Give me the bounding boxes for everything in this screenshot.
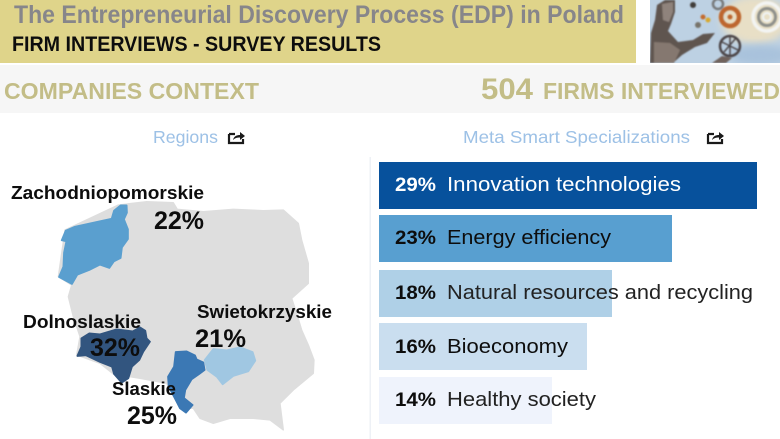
label: regions: Regions [153, 127, 218, 147]
bar: natural resources and recycling: 18% [395, 283, 436, 304]
bar: healthy society: Healthy society [447, 388, 597, 411]
icon: export regions [229, 132, 245, 143]
label: Slaskie: Slaskie [112, 379, 176, 399]
label: Dolnoslaskie: 32% [90, 334, 140, 362]
map: country outline [58, 202, 314, 430]
bar: natural resources and recycling [379, 270, 753, 317]
label: Dolnoslaskie: Dolnoslaskie [23, 312, 141, 332]
bar: natural resources and recycling: Natural resources and recycling [447, 281, 753, 304]
map of Poland [11, 183, 332, 430]
label: Slaskie: 25% [127, 402, 177, 430]
heading: firms interviewed [481, 73, 780, 106]
region: Slaskie [168, 351, 205, 413]
label: Zachodniopomorskie: Zachodniopomorskie [11, 183, 204, 203]
bar: innovation technologies [379, 162, 757, 209]
region: Zachodniopomorskie [59, 205, 128, 284]
label: Swietokrzyskie: Swietokrzyskie [197, 302, 332, 322]
bar: healthy society [379, 377, 597, 424]
label: Zachodniopomorskie [11, 183, 204, 235]
title banner [0, 0, 636, 63]
heading: firms interviewed: FIRMS INTERVIEWED [543, 78, 780, 104]
bar: innovation technologies: 29% [395, 175, 436, 196]
label: Swietokrzyskie: 21% [195, 325, 246, 353]
section band [0, 65, 780, 113]
bar: energy efficiency: Energy efficiency [447, 226, 612, 249]
bar: bioeconomy: 16% [395, 337, 436, 358]
icon: export specializations [708, 132, 724, 143]
label: Swietokrzyskie [195, 302, 332, 353]
region: Swietokrzyskie [205, 347, 255, 384]
bar: healthy society: 14% [395, 390, 436, 411]
title: The Entrepreneurial Discovery Process (EDP) in Poland [14, 1, 624, 29]
label: meta smart specializations: Meta Smart Specializations [463, 127, 690, 147]
heading: companies context: COMPANIES CONTEXT [4, 78, 259, 104]
bar: innovation technologies: Innovation technologies [447, 173, 681, 196]
label: Zachodniopomorskie: 22% [154, 207, 204, 235]
subtitle: FIRM INTERVIEWS - SURVEY RESULTS [12, 33, 381, 56]
heading: firms interviewed: 504 [481, 73, 533, 106]
label: Slaskie [112, 379, 177, 430]
bar: energy efficiency [379, 215, 672, 262]
bar: energy efficiency: 23% [395, 228, 436, 249]
region: Dolnoslaskie [77, 327, 150, 383]
illustration: statue with gears [650, 0, 780, 65]
bar: bioeconomy [379, 323, 587, 370]
label: Dolnoslaskie [23, 312, 141, 362]
bar chart: meta smart specializations [379, 162, 757, 424]
bar: bioeconomy: Bioeconomy [447, 335, 569, 358]
